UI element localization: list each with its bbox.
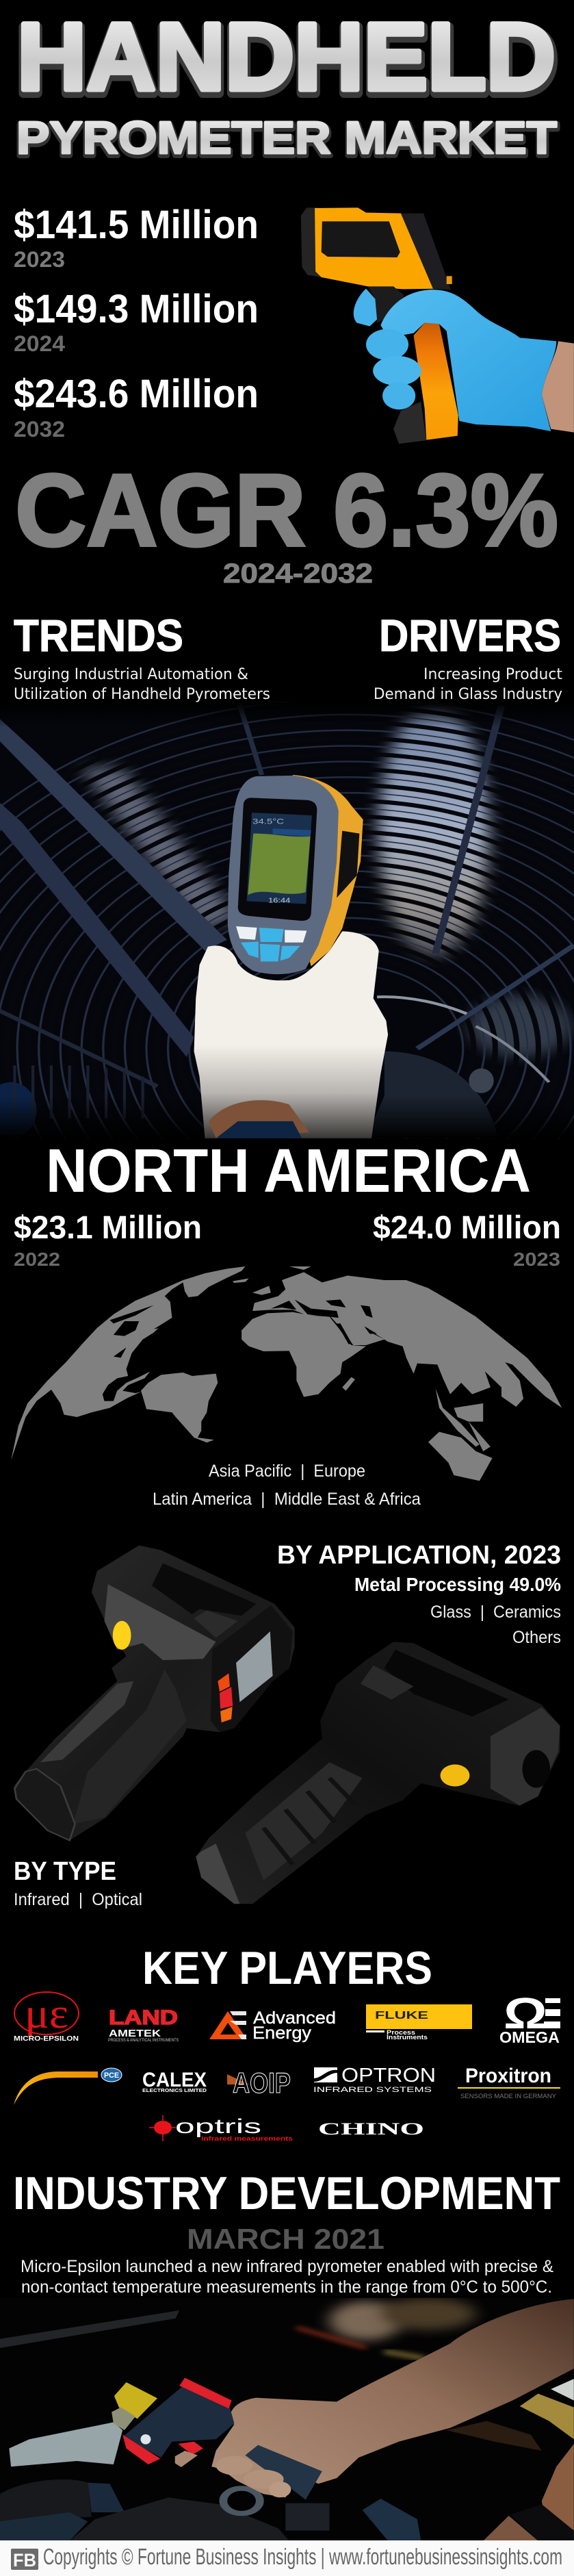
logo: Proxitron: Proxitron (465, 2065, 551, 2087)
logo: Optron: OPTRON (341, 2065, 436, 2087)
logo: Calex: CALEX (142, 2069, 207, 2091)
title line: Pyrometer Market: PYROMETER MARKET (16, 112, 557, 164)
trends description: Surging Industrial Automation & (14, 666, 248, 683)
trends description (14, 666, 270, 703)
icon: yellow pyrometer held in blue glove (301, 207, 574, 444)
footer (0, 2540, 574, 2576)
logo: Micro-Epsilon: με (25, 1991, 68, 2037)
logo: Chino: CHINO (318, 2120, 424, 2139)
panel: fan background photo with thermal imager (0, 702, 574, 1138)
logo: Land Ametek: PROCESS & ANALYTICAL INSTRUMENTS (108, 2039, 179, 2043)
drivers description: Increasing Product (423, 666, 562, 683)
by type segment (14, 1857, 142, 1909)
key players heading: KEY PLAYERS (142, 1942, 432, 1994)
logo: Calex: ELECTRONICS LIMITED (142, 2089, 207, 2093)
2024 value (14, 287, 259, 356)
exposed wrist and sleeve (209, 1100, 309, 1138)
market size figures (14, 203, 259, 442)
logo: AOIP: AOIP (233, 2067, 291, 2099)
north america 2023 value (373, 1209, 561, 1270)
logo: Fluke Process Instruments: FLUKE (375, 2010, 428, 2022)
other regions list: Asia Pacific | Europe (209, 1462, 365, 1481)
drivers description (374, 666, 562, 703)
thermal imager device: 16:44 (268, 897, 291, 904)
2023 value: 2023 (14, 247, 65, 272)
title line: Pyrometer Market: PYROMETER MARKET (16, 114, 558, 166)
logo: Land Ametek: AMETEK (109, 2028, 161, 2039)
thermal imager device: 34.5°C (252, 817, 285, 826)
2024 value: 2024 (14, 331, 65, 356)
north america 2022 value: $23.1 Million (14, 1209, 202, 1245)
2024 value: $149.3 Million (14, 287, 259, 331)
white knitted glove (194, 931, 388, 1138)
panel: bottom photo of arm using pyrometer on engine (0, 2298, 574, 2541)
leading application share: Metal Processing 49.0% (354, 1574, 561, 1595)
2023 value (14, 203, 259, 272)
2032 value: 2032 (14, 417, 65, 442)
logo: Micro-Epsilon: MICRO-EPSILON (14, 2035, 79, 2043)
logo: Fluke Process Instruments: Instruments (387, 2034, 428, 2041)
logo: Advanced Energy: Advanced (253, 2008, 336, 2028)
title line: Handheld: HANDHELD (17, 3, 556, 110)
industry development date: MARCH 2021 (187, 2223, 384, 2255)
logo: Optron (313, 2065, 436, 2094)
other applications (430, 1603, 561, 1647)
type list: Infrared | Optical (14, 1890, 142, 1909)
north america 2022 value (14, 1209, 202, 1270)
title (16, 3, 558, 166)
logo: Optris: optris (175, 2115, 261, 2138)
industry development description: non-contact temperature measurements in the range from 0°C to 500°C. (21, 2278, 552, 2297)
industry development description (21, 2257, 553, 2297)
icon: Fortune Business Insights logo: FB (13, 2550, 36, 2571)
logo: Fluke Process Instruments: Process (387, 2029, 415, 2036)
logo: PCE (14, 2068, 122, 2105)
north america 2022 value: 2022 (14, 1249, 60, 1270)
by type segment: BY TYPE (14, 1857, 116, 1886)
logo: Omega: OMEGA (499, 2028, 560, 2046)
industry development description: Micro-Epsilon launched a new infrared pyrometer enabled with precise & (21, 2257, 553, 2276)
logo: Omega: Ω (504, 1989, 547, 2038)
icon: black pyrometer front view (14, 1546, 295, 1840)
drivers description: Demand in Glass Industry (374, 686, 562, 703)
thermal imager device (228, 775, 363, 974)
panel: trends: TRENDS (14, 610, 183, 661)
logo: Advanced Energy (209, 2008, 336, 2043)
icon: black pyrometer rear view (196, 1642, 560, 1904)
trends description: Utilization of Handheld Pyrometers (14, 686, 270, 703)
regional heading: North America: NORTH AMERICA (46, 1137, 531, 1206)
other applications: Glass | Ceramics (430, 1603, 561, 1622)
logo: PCE: PCE (104, 2071, 119, 2080)
other applications: Others (512, 1628, 561, 1647)
by application segment: BY APPLICATION, 2023 (277, 1541, 561, 1570)
panel: drivers: DRIVERS (379, 610, 561, 661)
2032 value: $243.6 Million (14, 372, 259, 416)
2023 value: $141.5 Million (14, 203, 259, 247)
logo: Optron: INFRARED SYSTEMS (313, 2086, 432, 2094)
title line: Handheld: HANDHELD (17, 6, 557, 114)
logo: Proxitron: SENSORS MADE IN GERMANY (460, 2093, 556, 2100)
by application segment (277, 1541, 561, 1647)
logo: Land Ametek (108, 2006, 179, 2043)
world map on globe (11, 1266, 562, 1481)
CAGR headline: CAGR 6.3% (15, 452, 558, 568)
other regions list (153, 1462, 421, 1509)
logo: Advanced Energy: Energy (252, 2024, 312, 2043)
logo: Land Ametek: LAND (109, 2006, 178, 2029)
logo: Fluke Process Instruments (366, 2004, 472, 2041)
north america 2023 value: 2023 (513, 1249, 560, 1270)
north america 2023 value: $24.0 Million (373, 1209, 561, 1245)
other regions list: Latin America | Middle East & Africa (153, 1490, 421, 1509)
panel: trends (14, 610, 270, 703)
logo: Proxitron (458, 2065, 560, 2100)
CAGR period: 2024-2032 (223, 559, 373, 589)
logo: Optris: infrared measurements (201, 2135, 293, 2142)
panel: drivers (374, 610, 562, 703)
logo: Omega (499, 1989, 560, 2046)
logo: Micro-Epsilon (14, 1991, 79, 2043)
logo: Optris (149, 2115, 293, 2142)
2032 value (14, 372, 259, 442)
